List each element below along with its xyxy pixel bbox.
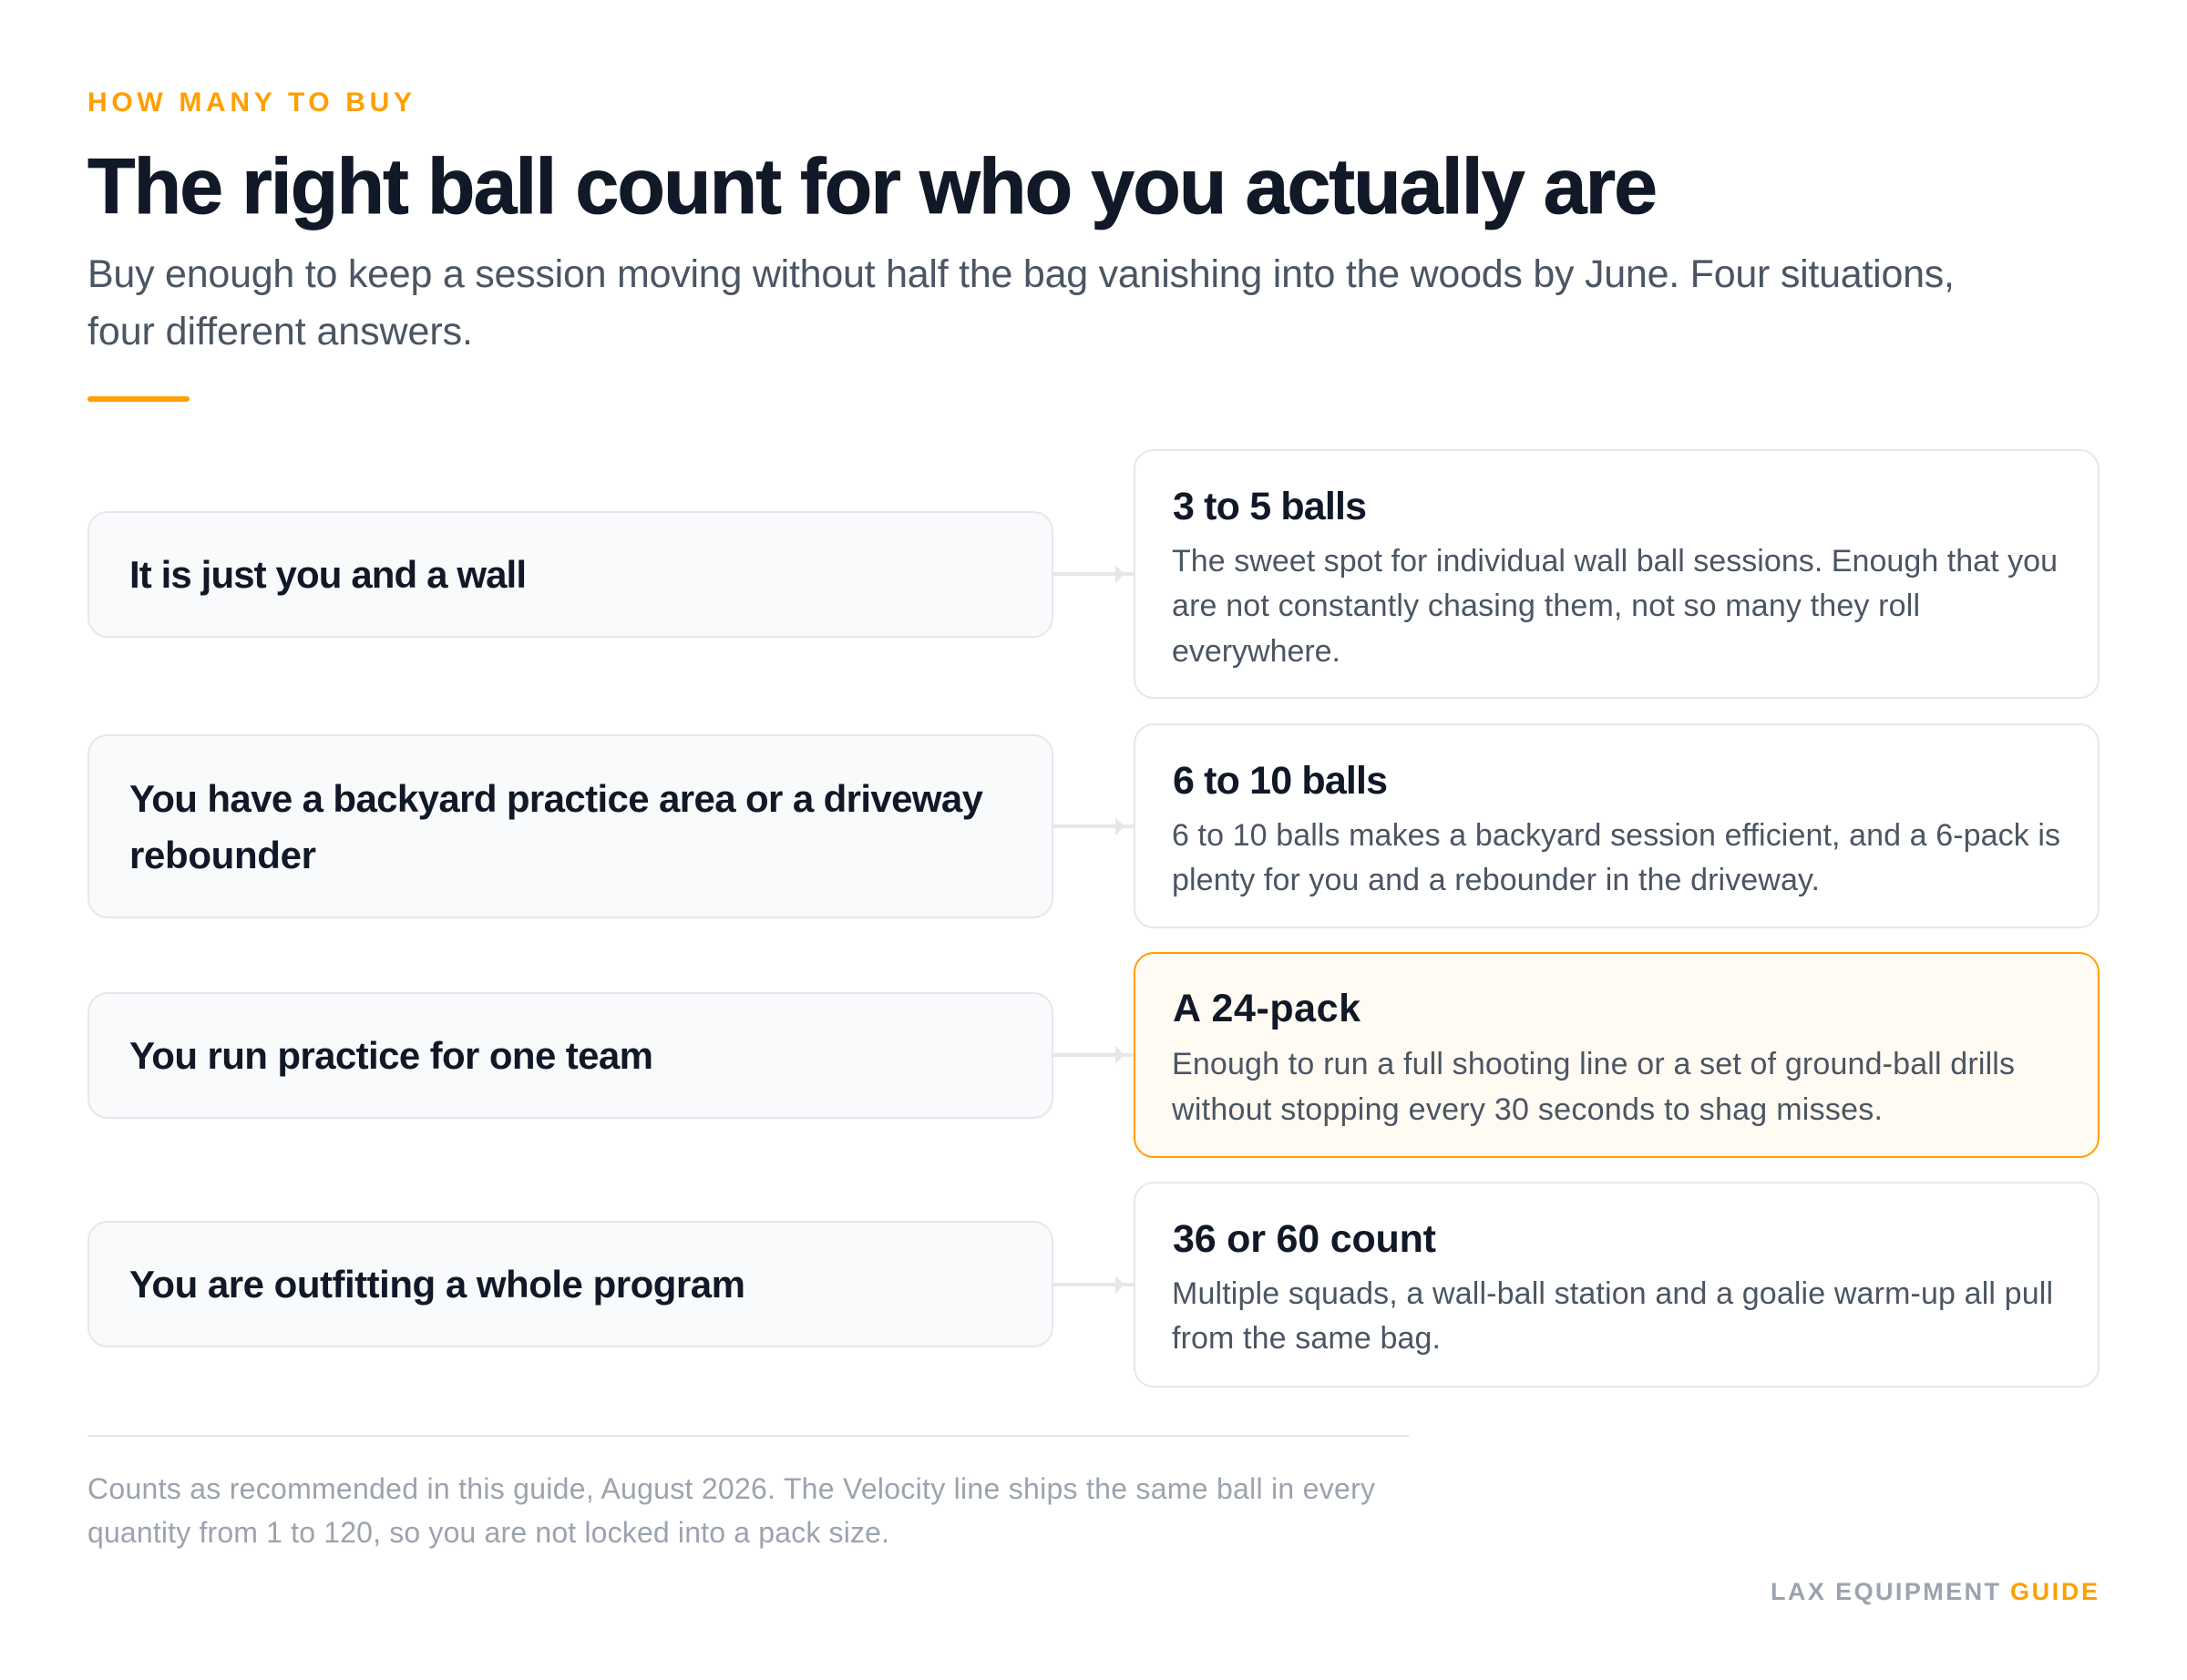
subtitle: four different answers. <box>87 310 473 353</box>
row 3: situation: You run practice for one team <box>129 1034 653 1077</box>
row 2: answer <box>1135 724 2099 927</box>
brand mark: GUIDE <box>2010 1578 2098 1605</box>
row 4: answer: from the same bag. <box>1172 1321 1441 1356</box>
footnote: Counts as recommended in this guide, August 2026. The Velocity line ships the same ball in every <box>87 1472 1375 1505</box>
title: The right ball count for who you actually are <box>87 143 1658 230</box>
subtitle: Buy enough to keep a session moving without half the bag vanishing into the woods by June. Four situations, <box>87 252 1955 296</box>
footnote: quantity from 1 to 120, so you are not locked into a pack size. <box>87 1516 889 1549</box>
row 2: situation <box>88 735 1052 917</box>
row 2: situation: rebounder <box>129 834 316 876</box>
row 1: answer: The sweet spot for individual wall ball sessions. Enough that you <box>1172 544 2058 579</box>
row 2: answer: plenty for you and a rebounder in the driveway. <box>1172 863 1820 897</box>
row 1: answer: are not constantly chasing them, not so many they roll <box>1172 589 1920 623</box>
row 3: situation <box>88 993 1052 1118</box>
row 1: arrow <box>1052 565 1135 583</box>
row 2: answer: 6 to 10 balls makes a backyard session efficient, and a 6-pack is <box>1172 818 2060 853</box>
subtitle <box>87 252 1955 353</box>
row 1: situation <box>88 512 1052 637</box>
row 4: arrow <box>1052 1275 1135 1294</box>
accent rule <box>87 396 190 402</box>
row 4: situation: You are outfitting a whole program <box>129 1263 745 1306</box>
brand mark: LAX EQUIPMENT <box>1771 1578 1999 1605</box>
row 3: answer (highlighted): A 24-pack <box>1173 987 1360 1030</box>
row 2: situation: You have a backyard practice area or a driveway <box>129 777 984 820</box>
footnote <box>87 1472 1375 1549</box>
eyebrow: HOW MANY TO BUY <box>87 87 412 118</box>
row 2: answer: 6 to 10 balls <box>1173 759 1388 803</box>
brand mark <box>1771 1578 2098 1605</box>
row 1: answer <box>1135 450 2099 698</box>
row 1: answer: 3 to 5 balls <box>1173 485 1367 528</box>
footer divider <box>87 1435 1409 1437</box>
row 3: answer (highlighted) <box>1135 953 2099 1157</box>
row 1: situation: It is just you and a wall <box>129 553 527 596</box>
row 1: answer: everywhere. <box>1172 634 1340 669</box>
row 4: answer <box>1135 1183 2099 1387</box>
row 3: answer (highlighted): without stopping every 30 seconds to shag misses. <box>1171 1092 1883 1127</box>
row 3: answer (highlighted): Enough to run a full shooting line or a set of ground-ball drills <box>1172 1047 2015 1081</box>
row 3: arrow <box>1052 1046 1135 1064</box>
row 4: answer: 36 or 60 count <box>1173 1217 1436 1261</box>
row 4: answer: Multiple squads, a wall-ball station and a goalie warm-up all pull <box>1172 1276 2053 1311</box>
row 4: situation <box>88 1222 1052 1347</box>
row 2: arrow <box>1052 817 1135 835</box>
